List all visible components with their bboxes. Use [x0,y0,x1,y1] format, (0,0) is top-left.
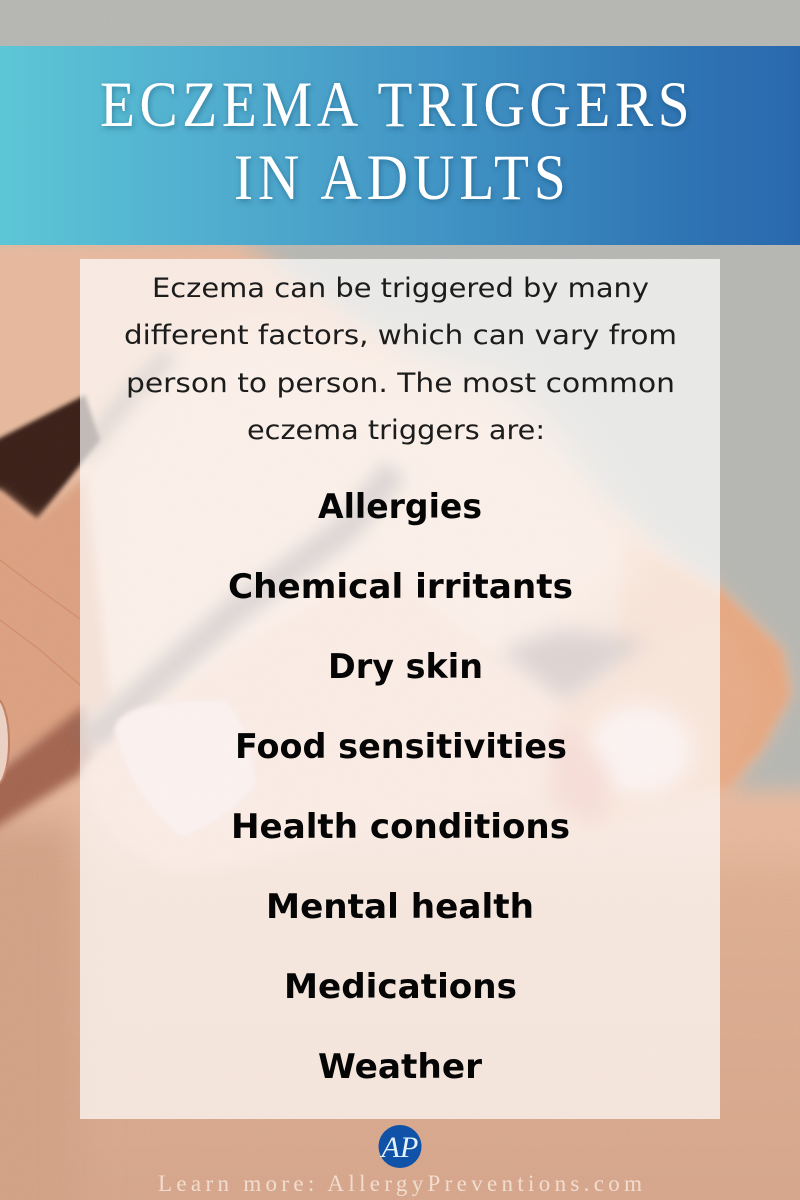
intro paragraph [124,273,677,446]
trigger list [228,487,573,1086]
trigger list: Allergies [318,487,482,526]
footer link text: Learn more: AllergyPreventions.com [158,1171,642,1196]
intro paragraph: eczema triggers are: [247,415,545,446]
icon: AP logo [378,1125,422,1168]
trigger list: Health conditions [231,807,570,846]
icon: AP logo: AP [380,1131,418,1164]
title: ECZEMA TRIGGERS [100,69,690,141]
intro paragraph: person to person. The most common [126,368,675,399]
title [100,69,690,214]
translucent content panel [80,259,720,1119]
trigger list: Medications [284,967,517,1006]
trigger list: Mental health [266,887,534,926]
title: IN ADULTS [234,142,566,214]
trigger list: Weather [318,1047,482,1086]
trigger list: Food sensitivities [235,727,567,766]
trigger list: Chemical irritants [228,567,573,606]
intro paragraph: Eczema can be triggered by many [152,273,649,304]
trigger list: Dry skin [328,647,483,686]
intro paragraph: different factors, which can vary from [124,320,677,351]
title banner [0,46,800,245]
